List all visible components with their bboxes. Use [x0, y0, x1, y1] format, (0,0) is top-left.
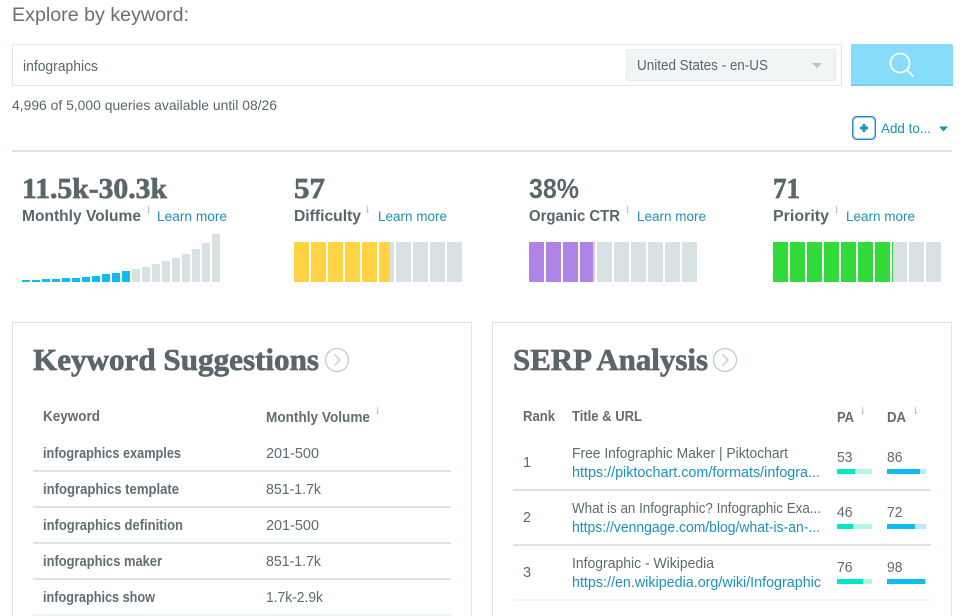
- table header: [523, 403, 918, 426]
- gauge: difficulty 57: [294, 242, 462, 282]
- search bar: [12, 44, 842, 86]
- result row 2: 72: [887, 505, 902, 521]
- bar chart: monthly volume trend: [22, 234, 220, 282]
- table rows: infographics definition: [43, 517, 183, 534]
- result row 3: 3: [523, 565, 531, 581]
- result row 2: [523, 501, 926, 536]
- add to button: Add to...: [881, 120, 931, 136]
- metric: organic ctr: i: [626, 202, 630, 216]
- result row 2: What is an Infographic? Infographic Exa...: [572, 501, 821, 517]
- result row 3: 98: [887, 560, 902, 576]
- table header: Title & URL: [572, 408, 642, 425]
- icon: circled arrow: [714, 348, 736, 372]
- icon: plus box: [853, 117, 875, 139]
- metric: organic ctr: Organic CTR: [529, 208, 620, 225]
- table rows: infographics template: [43, 481, 179, 498]
- result row 1: 53: [837, 450, 852, 466]
- icon: circled arrow: [326, 348, 348, 372]
- search input text: infographics: [23, 59, 98, 75]
- table rows: infographics examples: [43, 445, 181, 462]
- metric: difficulty: i: [366, 202, 370, 216]
- table header: [43, 403, 380, 426]
- metric: priority: 71: [773, 173, 800, 205]
- result row 2: 2: [523, 510, 531, 526]
- table rows: infographics show: [43, 589, 155, 606]
- metric: difficulty: Difficulty: [294, 208, 361, 225]
- table rows: 201-500: [266, 446, 319, 462]
- panel heading: Keyword Suggestions: [33, 342, 319, 377]
- result row 1: [523, 446, 926, 481]
- gauge: priority 71: [773, 242, 941, 282]
- panel: serp analysis: [492, 322, 952, 616]
- result row 3: https://en.wikipedia.org/wiki/Infographic: [572, 575, 821, 591]
- result row 2: 46: [837, 505, 852, 521]
- table header: i: [914, 403, 918, 417]
- table header: i: [376, 403, 380, 417]
- icon: magnifier: [890, 54, 914, 76]
- metric: monthly volume: Learn more: [157, 208, 227, 224]
- result row 2: https://venngage.com/blog/what-is-an-...: [572, 520, 820, 536]
- result row 3: Infographic - Wikipedia: [572, 556, 715, 572]
- table rows: 851-1.7k: [266, 554, 322, 570]
- metric: monthly volume: 11.5k-30.3k: [22, 173, 168, 205]
- metric: priority: [773, 173, 941, 282]
- metric: priority: i: [835, 202, 839, 216]
- heading: explore by keyword: Explore by keyword:: [12, 5, 189, 26]
- table rows: 1.7k-2.9k: [266, 590, 324, 606]
- table header: Keyword: [43, 408, 100, 425]
- result row 1: 86: [887, 450, 902, 466]
- table header: Monthly Volume: [266, 409, 370, 426]
- metric: monthly volume: i: [147, 202, 151, 216]
- panel heading: SERP Analysis: [513, 342, 708, 377]
- add to button: [853, 117, 948, 139]
- gauge: organic ctr 38: [529, 242, 697, 282]
- table header: i: [861, 403, 865, 417]
- table rows: [33, 445, 451, 616]
- metric: difficulty: Learn more: [378, 208, 447, 224]
- country dropdown: United States - en-US: [637, 58, 768, 74]
- table header: PA: [837, 409, 854, 426]
- result row 1: 1: [523, 455, 531, 471]
- table header: DA: [887, 409, 906, 426]
- table rows: 851-1.7k: [266, 482, 322, 498]
- metric: monthly volume: [22, 173, 227, 282]
- table rows: 201-500: [266, 518, 319, 534]
- table header: Rank: [523, 408, 556, 425]
- metric: organic ctr: [529, 173, 706, 282]
- metric: difficulty: 57: [294, 173, 325, 205]
- metric: priority: Learn more: [846, 208, 915, 224]
- metric: priority: Priority: [773, 208, 829, 225]
- result row 3: [523, 556, 926, 591]
- metric: organic ctr: 38%: [529, 173, 579, 204]
- metric: difficulty: [294, 173, 462, 282]
- metric: organic ctr: Learn more: [637, 208, 706, 224]
- result row 1: https://piktochart.com/formats/infogra...: [572, 465, 820, 481]
- metric: monthly volume: Monthly Volume: [22, 208, 141, 225]
- country dropdown: [626, 50, 836, 80]
- search button: [851, 44, 953, 86]
- quota text: 4,996 of 5,000 queries available until 08/26: [12, 97, 277, 113]
- table rows: infographics maker: [43, 553, 162, 570]
- result row 1: Free Infographic Maker | Piktochart: [572, 446, 788, 462]
- panel: keyword suggestions: [12, 322, 472, 616]
- result row 3: 76: [837, 560, 852, 576]
